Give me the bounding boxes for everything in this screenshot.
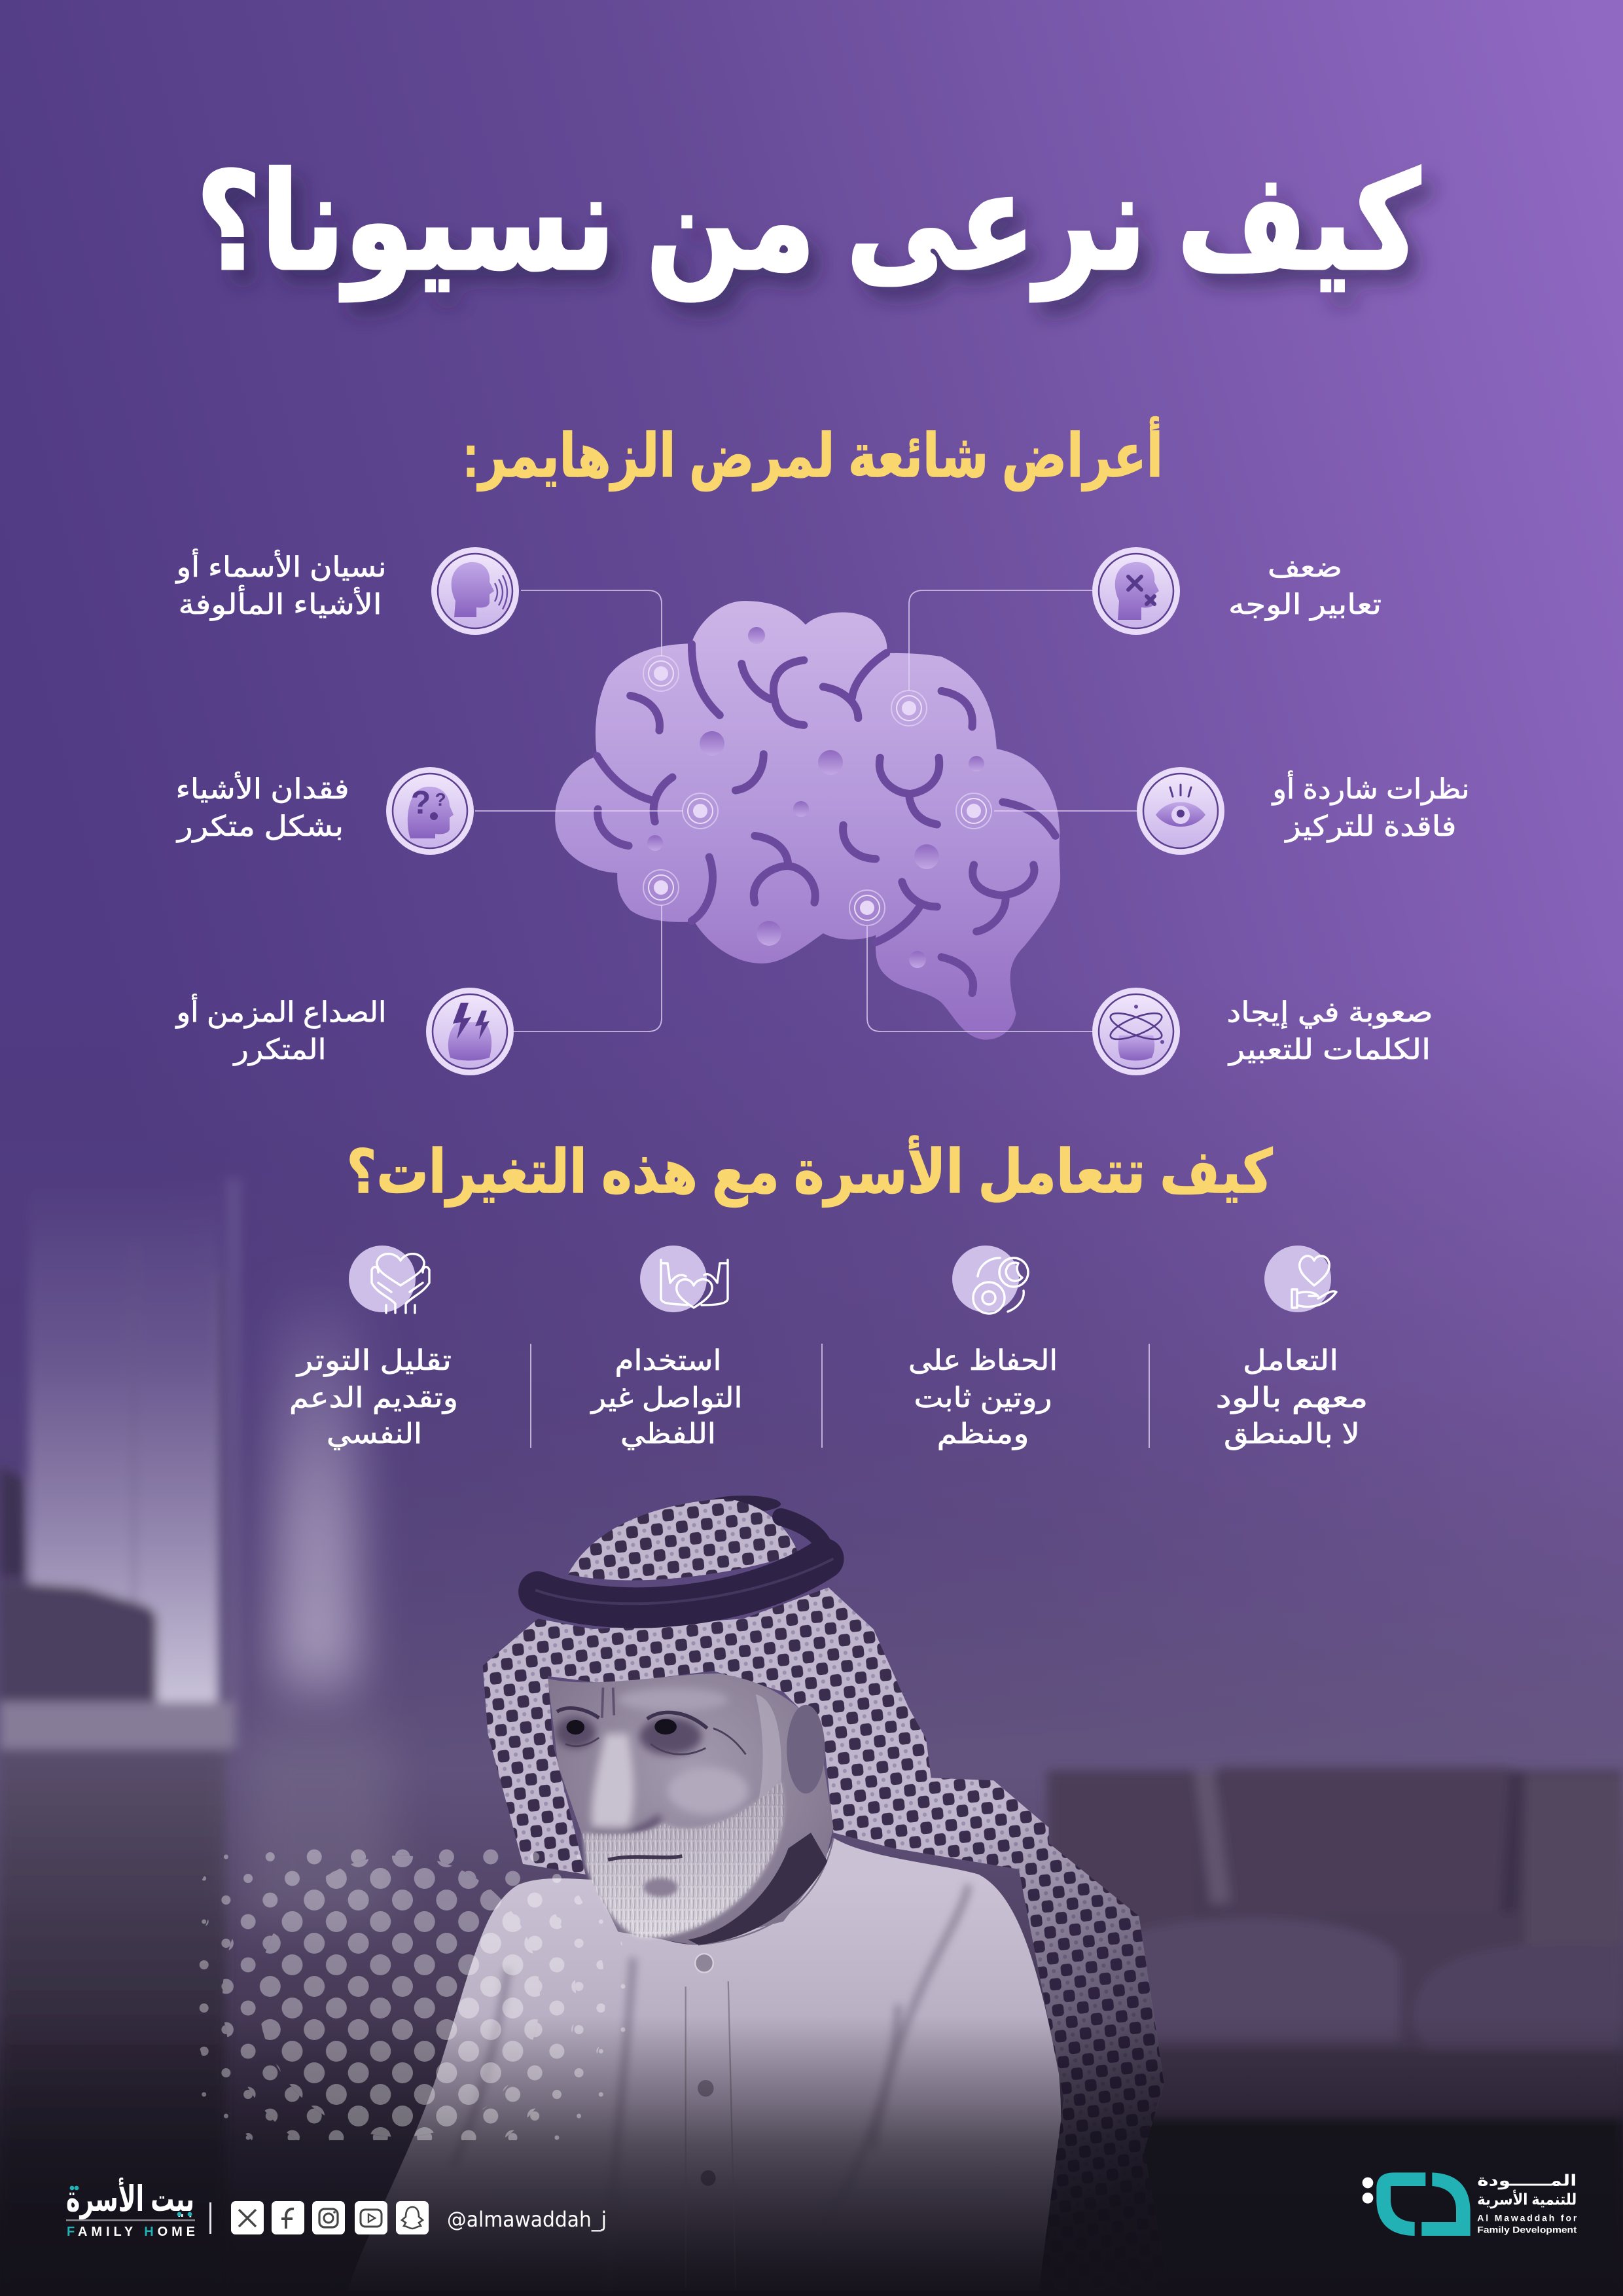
logo wordmark: Al Mawaddah for [1477,2212,1577,2223]
icon: weak facial expression, head with X marks [1092,547,1180,635]
background room photo: curtains, shelf, sofa [0,1178,1623,2296]
text: routine: ومنظم [937,1418,1029,1450]
face [548,1674,833,1945]
panel: family tips [289,1246,1368,1450]
text: deal with love: لا بالمنطق [1224,1418,1360,1450]
brain silhouette [555,601,1060,1040]
symptom text: headache [175,994,386,1066]
symptom text: headache: الصداع المزمن أو [175,994,386,1029]
icon: word finding, head with atom [1092,988,1180,1075]
heading: symptoms: أعراض شائعة لمرض الزهايمر: [463,416,1163,492]
text: reduce stress [289,1345,458,1450]
symptom text: distracted gaze [1271,770,1470,843]
icon: headache, head with lightning [426,988,514,1075]
heading: family: كيف تتعامل الأسرة مع هذه التغيرات؟ [347,1136,1273,1208]
icon: X [231,2201,264,2234]
brain bubbles [647,627,984,968]
symptom text: forgetting names [175,548,386,621]
target nodes [643,656,991,925]
symptom text: headache: المتكرر [232,1034,326,1066]
beard [583,1780,827,1945]
logo wordmark: Family Development [1477,2225,1577,2235]
icon: staring eye [1137,767,1224,855]
footer: social handle: @almawaddah_j [447,2207,607,2232]
icon: snapchat [396,2201,429,2234]
footer: Al Mawaddah logo [1363,2172,1577,2236]
symptom text: weak expressions: ضعف [1268,552,1342,583]
icon: hands with heart, nonverbal communication [640,1246,728,1312]
logo wordmark [1477,2172,1577,2235]
thobe garment [348,1838,1061,2291]
icon: losing things, head with question marks: ? [411,784,431,821]
ghutra shadow [829,1708,1169,2291]
text: deal with love: التعامل [1243,1345,1338,1376]
symptom text: distracted gaze: فاقدة للتركيز [1284,811,1457,843]
text: reduce stress: وتقديم الدعم [289,1382,458,1414]
icon: facebook [272,2201,304,2234]
text: routine [908,1345,1058,1450]
text: routine: الحفاظ على [908,1345,1058,1376]
symptom text: losing things: بشكل متكرر [176,811,344,843]
symptom text: forgetting names: الأشياء المألوفة [178,584,382,621]
symptom text: distracted gaze: نظرات شاردة أو [1271,770,1470,806]
text: nonverbal communication: اللفظي [620,1418,716,1450]
symptom text: weak expressions [1228,552,1382,621]
text: deal with love [1216,1345,1368,1450]
icon: heart over hand, deal with love [1264,1246,1336,1312]
icon: losing things, head with question marks: ? [435,789,446,810]
logo wordmark: المــــــودة [1477,2172,1577,2189]
symptom text: losing things: فقدان الأشياء [175,771,349,805]
symptom text: word finding: الكلمات للتعبير [1228,1034,1431,1066]
footer: Family Home logo: بيت الأسرة [66,2178,194,2219]
connector lines [475,590,1139,1031]
icon: youtube [355,2201,387,2234]
photo: elderly man in ghutra and agal [348,1496,1169,2291]
icon: hands with heart, reduce stress [349,1246,429,1313]
text: nonverbal communication: التواصل غير [590,1382,742,1414]
icon: losing things, head with question marks [386,767,474,855]
halftone dot pattern [199,1850,626,2140]
ghutra headscarf [483,1587,1169,2291]
symptom text: forgetting names: نسيان الأسماء أو [175,548,386,584]
text: routine: روتين ثابت [914,1382,1052,1414]
logo mark [1363,2172,1471,2236]
footer: Family Home logo [66,2178,195,2239]
text: deal with love: معهم بالود [1216,1382,1368,1414]
symptom text: word finding: صعوبة في إيجاد [1226,997,1433,1029]
text: reduce stress: النفسي [327,1418,422,1450]
icon: forgetting names, head with sound waves [431,547,519,635]
text: nonverbal communication [590,1345,742,1450]
symptom text: weak expressions: تعابير الوجه [1228,589,1382,621]
panel: brain diagram [475,590,1139,1040]
footer: social icons [231,2201,429,2234]
bottom dark vignette [0,2016,1623,2296]
icon: sun and moon routine [952,1246,1028,1314]
icon: instagram [312,2201,345,2234]
logo wordmark: للتنمية الأسرية [1477,2189,1577,2208]
thobe folds and buttons [453,1838,969,2291]
agal ring and cap [535,1496,833,1607]
text: nonverbal communication: استخدام [615,1345,721,1376]
text: reduce stress: تقليل التوتر [296,1345,452,1377]
symptom text: word finding [1226,997,1433,1066]
footer: Family Home logo: F AMILY H OME [67,2225,195,2239]
symptom text: losing things [175,771,349,843]
